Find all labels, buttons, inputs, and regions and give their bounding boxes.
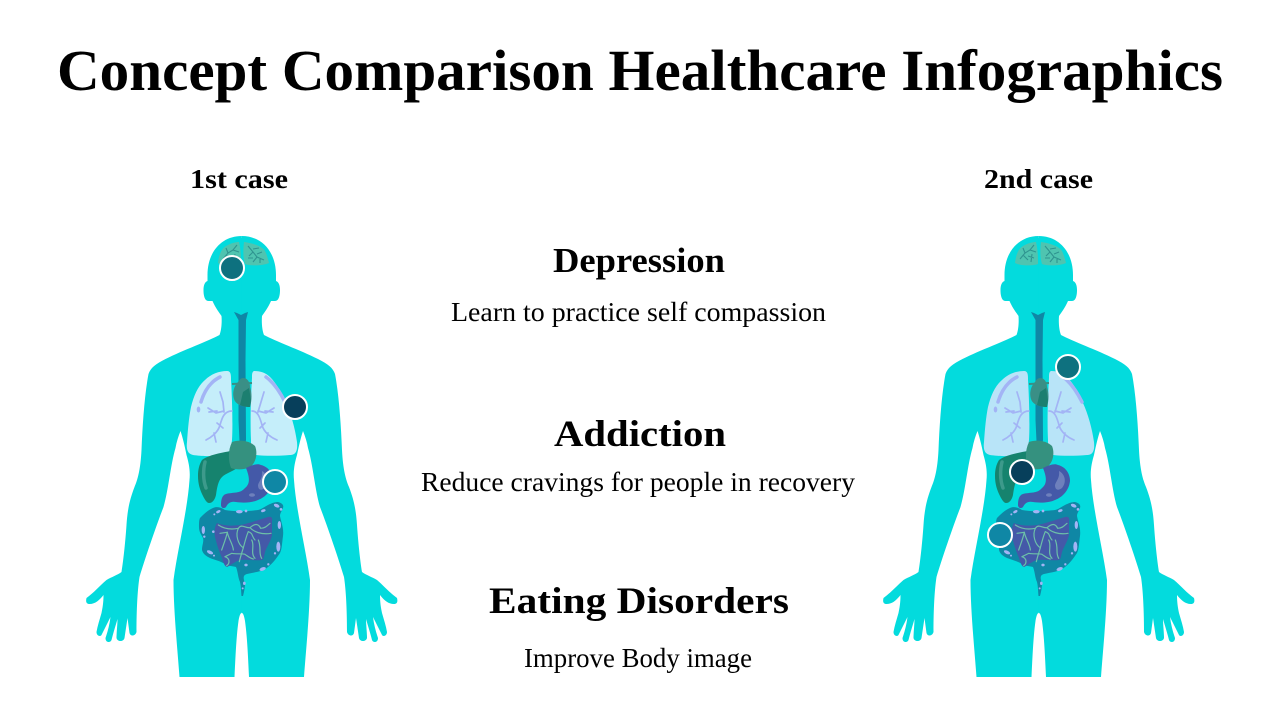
marker: eating disorders xyxy=(988,523,1012,547)
large intestine xyxy=(996,502,1080,596)
small intestine xyxy=(1012,517,1069,567)
brain xyxy=(218,242,269,265)
liver xyxy=(995,441,1053,503)
marker: addiction xyxy=(1010,460,1034,484)
description: depression: Learn to practice self compassion xyxy=(451,297,827,327)
marker: depression xyxy=(220,256,244,280)
panel: 2nd case xyxy=(883,164,1194,677)
text block: eating disorders xyxy=(489,581,789,673)
panel: 1st case xyxy=(86,164,397,677)
stomach xyxy=(1018,464,1070,508)
stomach xyxy=(221,464,273,508)
human body silhouette xyxy=(883,236,1194,677)
left lung xyxy=(984,371,1029,456)
lung veins xyxy=(994,377,1082,442)
text block: depression xyxy=(451,241,827,327)
liver xyxy=(198,441,256,503)
description: eating disorders: Improve Body image xyxy=(524,643,752,673)
lung veins xyxy=(197,377,285,442)
text block: addiction xyxy=(421,414,855,497)
heart xyxy=(1029,378,1049,407)
large intestine xyxy=(199,502,283,596)
heading: eating disorders: Eating Disorders xyxy=(489,581,789,622)
marker: depression xyxy=(1056,355,1080,379)
right lung xyxy=(251,371,297,456)
brain xyxy=(1015,242,1066,265)
heading: addiction: Addiction xyxy=(554,414,726,455)
trachea xyxy=(1031,312,1045,452)
human body silhouette xyxy=(86,236,397,677)
description: addiction: Reduce cravings for people in recovery xyxy=(421,467,855,497)
marker: addiction xyxy=(283,395,307,419)
left lung xyxy=(187,371,232,456)
right lung xyxy=(1048,371,1094,456)
small intestine xyxy=(215,517,272,567)
heading: 2nd case: 2nd case xyxy=(984,164,1093,194)
heading: depression: Depression xyxy=(553,241,725,280)
marker: eating disorders xyxy=(263,470,287,494)
heading: 1st case: 1st case xyxy=(190,164,288,194)
title: Concept Comparison Healthcare Infographics xyxy=(57,38,1223,103)
heart xyxy=(232,378,252,407)
trachea xyxy=(234,312,248,452)
